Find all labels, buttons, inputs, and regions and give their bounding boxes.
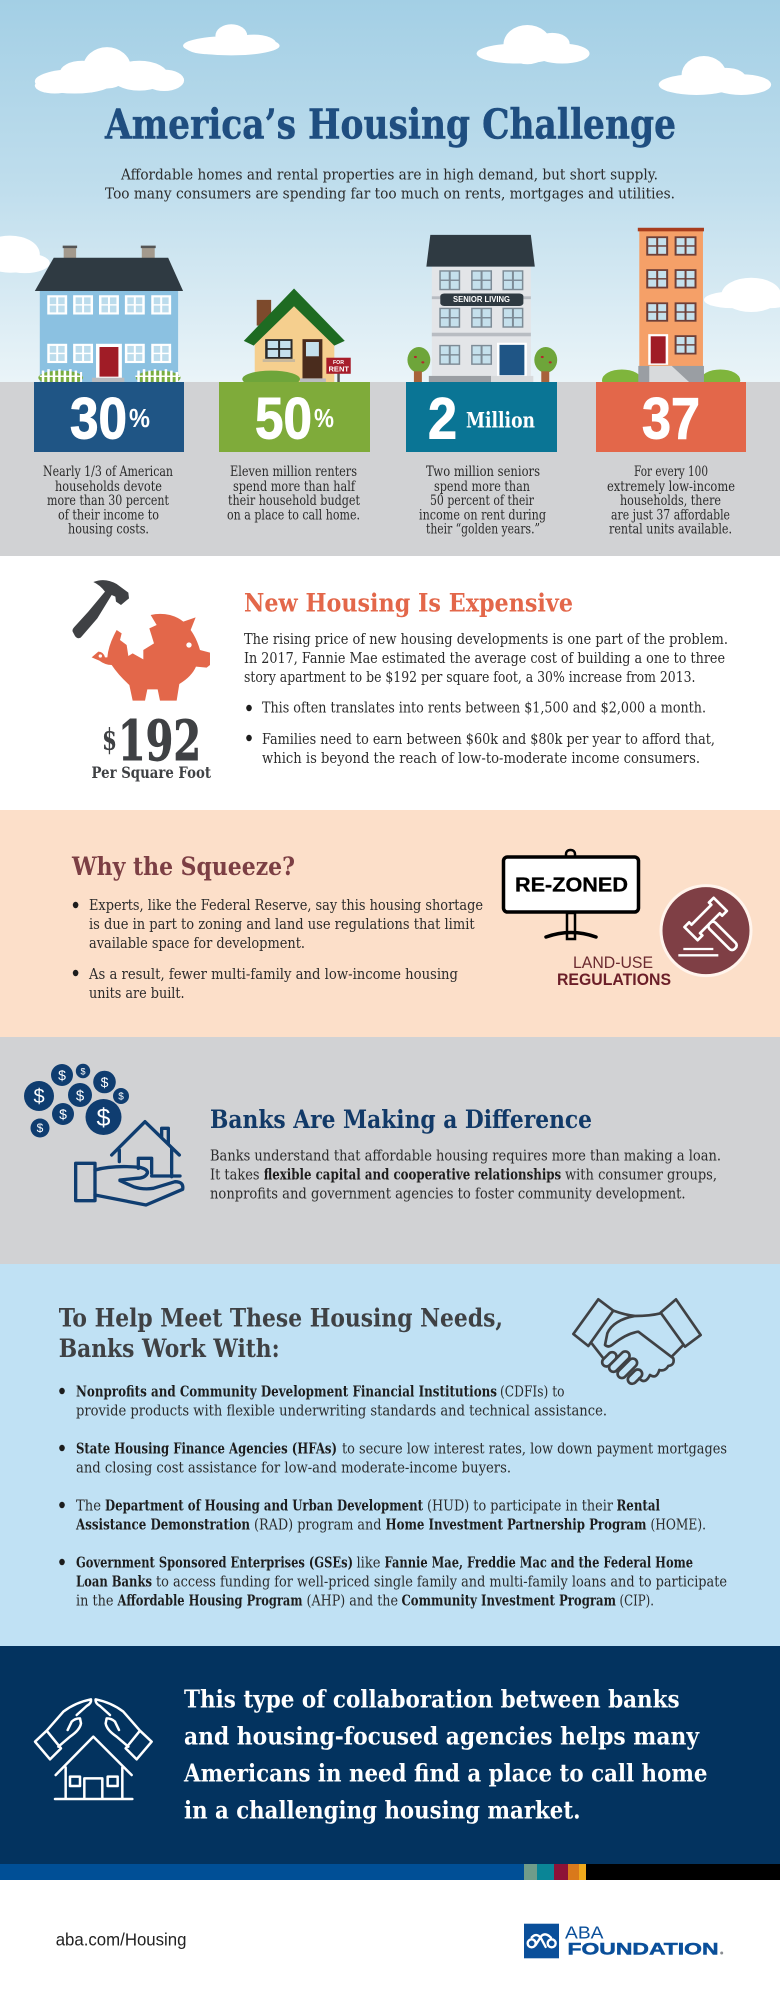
- icon: dollar coins: $: [37, 1121, 44, 1135]
- bullet: gses: Affordable Housing Program: [117, 1593, 303, 1610]
- caption: 2 million: Two million seniors: [426, 464, 540, 480]
- bullet list: units are built.: [89, 986, 185, 1002]
- caption: 37 units: are just 37 affordable: [611, 508, 730, 524]
- label: land-use regulations: [557, 953, 671, 989]
- bullet: hud: (HUD) to participate in their: [427, 1499, 613, 1515]
- closing statement: This type of collaboration between banks: [184, 1685, 680, 1714]
- logo: aba foundation: FOUNDATION: [568, 1939, 718, 1958]
- title: America’s Housing Challenge: [104, 101, 676, 149]
- body text: story apartment to be $192 per square foot, a 30% increase from 2013.: [244, 670, 696, 686]
- caption: 30 percent: housing costs.: [68, 522, 149, 538]
- logo: aba foundation: ABA: [565, 1922, 604, 1942]
- bullet list: is due in part to zoning and land use regulations that limit: [89, 917, 475, 933]
- bullet list: This often translates into rents between $1,500 and $2,000 a month.: [262, 701, 706, 717]
- caption: 2 million: their “golden years.”: [426, 522, 540, 538]
- icon: dollar coins: $: [97, 1104, 111, 1132]
- icon: dollar coins: $: [80, 1066, 86, 1076]
- bullet: gses: in the: [76, 1594, 114, 1610]
- closing statement: [183, 1685, 708, 1825]
- icon: orange apartment tower: [602, 228, 740, 391]
- icon: handshake: [573, 1299, 701, 1386]
- body text: [244, 632, 728, 686]
- clouds: [0, 24, 780, 312]
- bullet: hud: Rental: [616, 1498, 660, 1515]
- body text: In 2017, Fannie Mae estimated the average cost of building a one to three: [244, 651, 725, 667]
- heading: Why the Squeeze?: [71, 852, 295, 882]
- body text: [210, 1149, 721, 1203]
- price callout: [92, 708, 212, 782]
- icon: dollar coins: [24, 1064, 129, 1138]
- stat box: 2 million: [406, 382, 557, 452]
- stat box: 2 million: Million: [466, 408, 535, 432]
- bullet: hfas: and closing cost assistance for low-and moderate-income buyers.: [76, 1461, 511, 1477]
- footer url: aba.com/Housing: [56, 1930, 187, 1950]
- caption: 30 percent: households devote: [55, 479, 162, 495]
- caption: 30 percent: [43, 464, 173, 538]
- caption: 2 million: spend more than: [434, 479, 530, 495]
- price callout: $: [102, 723, 117, 758]
- price callout: Per Square Foot: [92, 763, 212, 782]
- icon: dollar coins: $: [59, 1106, 67, 1122]
- bullet: hud: The: [76, 1499, 101, 1515]
- bullet: hud: Home Investment Partnership Program: [386, 1517, 647, 1534]
- stat box: 37: [596, 382, 746, 452]
- panel: collaboration banner: [0, 1646, 780, 1864]
- subtitle: [105, 167, 675, 203]
- panel: hero sky: [0, 0, 780, 382]
- closing statement: Americans in need find a place to call home: [183, 1759, 708, 1788]
- bullet list: Families need to earn between $60k and $80k per year to afford that,: [262, 732, 715, 748]
- subtitle: Too many consumers are spending far too much on rents, mortgages and utilities.: [105, 187, 675, 203]
- icon: broken piggy bank: [92, 614, 210, 701]
- body text: flexible capital and cooperative relationships: [264, 1167, 561, 1184]
- caption: 50 percent: their household budget: [228, 493, 360, 509]
- icon: dollar coins: $: [101, 1074, 109, 1090]
- label: land-use regulations: REGULATIONS: [557, 970, 671, 989]
- closing statement: in a challenging housing market.: [184, 1796, 581, 1825]
- icon: hand holding house: [76, 1122, 183, 1205]
- bullet: gses: [59, 1555, 727, 1610]
- icon: dollar coins: $: [118, 1092, 124, 1102]
- caption: 50 percent: [227, 464, 360, 524]
- body text: nonprofits and government agencies to foster community development.: [210, 1187, 686, 1203]
- bullet: cdfis: provide products with flexible underwriting standards and technical assistance.: [76, 1404, 607, 1420]
- body text: The rising price of new housing developments is one part of the problem.: [244, 632, 728, 648]
- sign text: for rent: [328, 360, 350, 374]
- caption: 50 percent: Eleven million renters: [230, 464, 357, 480]
- caption: 30 percent: Nearly 1/3 of American: [43, 464, 173, 480]
- bullet: gses: like: [356, 1556, 380, 1572]
- heading: Banks Are Making a Difference: [210, 1105, 592, 1135]
- caption: 50 percent: on a place to call home.: [227, 508, 360, 524]
- icon: hammer: [72, 580, 129, 638]
- panel: banks are making a difference: [0, 1037, 780, 1264]
- body text: Banks understand that affordable housing requires more than making a loan.: [210, 1149, 721, 1165]
- bullet: hfas: [59, 1441, 727, 1477]
- sign text: for rent: RENT: [328, 366, 350, 374]
- bullet: hfas: to secure low interest rates, low down payment mortgages: [342, 1442, 727, 1458]
- logo: aba foundation: [524, 1922, 723, 1958]
- stat box: 50%: 50: [255, 387, 312, 452]
- icon: dollar coins: $: [33, 1086, 45, 1108]
- bullet list: As a result, fewer multi-family and low-income housing: [88, 967, 458, 983]
- stat box: 50%: [219, 382, 370, 452]
- heading: [59, 1304, 503, 1364]
- caption: 37 units: rental units available.: [609, 522, 732, 538]
- caption: 37 units: For every 100: [634, 464, 708, 480]
- panel: banks work with: [0, 1264, 780, 1646]
- stat box: 37: 37: [642, 387, 700, 452]
- caption: 37 units: [607, 464, 735, 538]
- bullet list: [73, 898, 483, 1002]
- bullet: cdfis: [59, 1384, 607, 1420]
- bullet: gses: Fannie Mae, Freddie Mac and the Federal Home: [384, 1555, 693, 1572]
- heading: To Help Meet These Housing Needs,: [59, 1304, 503, 1334]
- price callout: 192: [118, 708, 201, 773]
- bullet: gses: Government Sponsored Enterprises (GSEs): [76, 1555, 353, 1572]
- bullet: hud: (HOME).: [650, 1518, 706, 1534]
- stat box: 50%: %: [314, 403, 334, 433]
- panel: statistics band: [0, 228, 780, 556]
- stat box: 30%: %: [129, 403, 150, 433]
- caption: 37 units: extremely low-income: [607, 479, 735, 495]
- subtitle: Affordable homes and rental properties are in high demand, but short supply.: [120, 167, 658, 183]
- closing statement: and housing-focused agencies helps many: [184, 1722, 700, 1751]
- icon: small rental house: [242, 288, 351, 388]
- stat box: 30%: 30: [70, 387, 127, 452]
- icon: senior living building: [407, 235, 557, 382]
- stat box: 30%: [34, 382, 184, 452]
- heading: Banks Work With:: [59, 1334, 280, 1364]
- caption: 2 million: 50 percent of their: [430, 493, 534, 509]
- bullet: gses: (AHP) and the: [306, 1594, 398, 1610]
- icon: gavel badge: [661, 886, 751, 976]
- icon: dollar coins: $: [76, 1088, 85, 1104]
- bullet: hud: (RAD) program and: [254, 1518, 382, 1534]
- bullet: hud: Assistance Demonstration: [75, 1517, 250, 1534]
- bullet list: available space for development.: [89, 936, 305, 952]
- caption: 37 units: households, there: [620, 493, 721, 509]
- bullet: hfas: State Housing Finance Agencies (HFAs): [76, 1441, 337, 1458]
- caption: 30 percent: of their income to: [58, 508, 159, 524]
- sign text: for rent: FOR: [333, 360, 344, 366]
- icon: hands over house: [35, 1699, 152, 1799]
- icon: re-zoned sign: [504, 850, 638, 939]
- caption: 30 percent: more than 30 percent: [47, 493, 169, 509]
- body text: It takes: [210, 1168, 260, 1184]
- label: land-use regulations: LAND-USE: [573, 953, 653, 972]
- bullet: cdfis: (CDFIs) to: [500, 1385, 564, 1401]
- panel: why the squeeze: [0, 810, 780, 1037]
- bullet: gses: Loan Banks: [76, 1574, 152, 1591]
- bullet: cdfis: Nonprofits and Community Development Financial Institutions: [76, 1384, 497, 1401]
- bullet: gses: (CIP).: [620, 1594, 654, 1610]
- body text: with consumer groups,: [565, 1168, 717, 1184]
- bullet list: Experts, like the Federal Reserve, say this housing shortage: [89, 898, 483, 914]
- icon: re-zoned sign: RE-ZONED: [515, 874, 628, 897]
- sign text: senior living: SENIOR LIVING: [453, 295, 510, 304]
- bullet: gses: Community Investment Program: [402, 1593, 617, 1610]
- icon: dollar coins: $: [58, 1067, 66, 1083]
- caption: 2 million: [419, 464, 546, 538]
- color stripe: [0, 1864, 780, 1880]
- bullet list: which is beyond the reach of low-to-moderate income consumers.: [262, 751, 700, 767]
- stat box: 2 million: 2: [428, 387, 457, 452]
- bullet: hud: Department of Housing and Urban Development: [105, 1498, 423, 1515]
- caption: 50 percent: spend more than half: [233, 479, 356, 495]
- caption: 2 million: income on rent during: [419, 508, 546, 524]
- bullet list: [246, 701, 715, 767]
- bullet: hud: [59, 1498, 706, 1534]
- panel: new housing is expensive: [0, 556, 780, 810]
- icon: blue two-story house: [35, 246, 183, 385]
- heading: New Housing Is Expensive: [244, 589, 573, 619]
